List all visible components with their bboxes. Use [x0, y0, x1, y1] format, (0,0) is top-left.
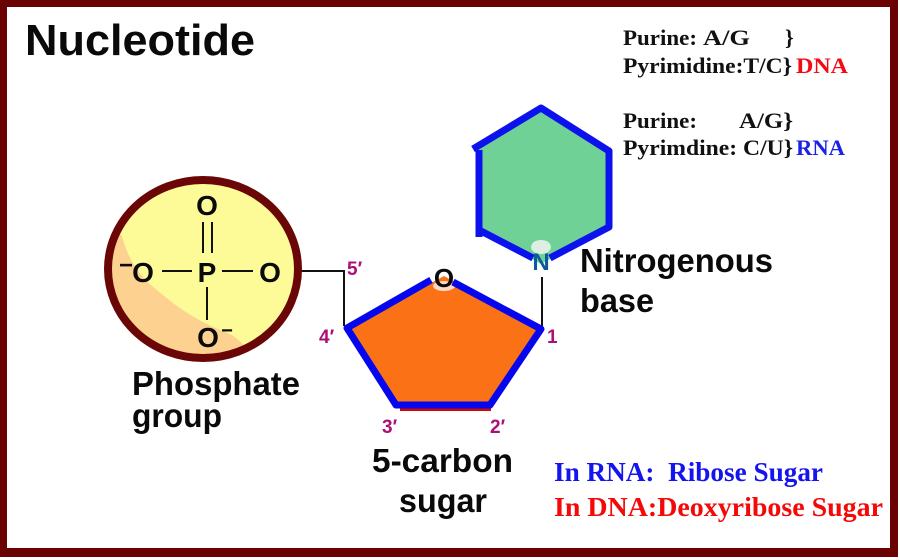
label: phosphate group: group — [132, 397, 222, 434]
panel: DNA base key — [623, 25, 848, 78]
connector lines — [300, 271, 542, 330]
callout: sugar types: In RNA: Ribose Sugar — [554, 457, 823, 487]
carbon position labels: 3′ — [382, 417, 398, 438]
carbon position labels: 1 — [547, 327, 558, 348]
icon: phosphate group circle: P — [198, 257, 216, 288]
icon: 5-carbon sugar pentagon — [347, 263, 541, 409]
label: 5-carbon sugar — [372, 442, 513, 519]
title: Nucleotide — [25, 16, 255, 65]
panel: DNA base key: } — [785, 25, 794, 50]
callout: sugar types — [554, 457, 883, 522]
icon: nitrogenous base hexagon: N — [532, 249, 550, 276]
panel: DNA base key: DNA — [796, 53, 848, 78]
panel: RNA base key: A/G} — [739, 108, 793, 133]
label: phosphate group: Phosphate — [132, 365, 300, 402]
panel: RNA base key: Purine: — [623, 108, 697, 133]
icon: nitrogenous base hexagon — [473, 108, 609, 276]
label: 5-carbon sugar: 5-carbon — [372, 442, 513, 479]
callout: sugar types: In DNA:Deoxyribose Sugar — [554, 492, 883, 522]
label: phosphate group — [132, 365, 300, 434]
panel: DNA base key: Purine: — [623, 25, 697, 50]
carbon position labels: 2′ — [490, 417, 506, 438]
panel: DNA base key: A/G — [703, 25, 750, 50]
icon: phosphate group circle: O — [197, 322, 219, 353]
panel: RNA base key — [623, 108, 845, 160]
carbon position labels — [319, 259, 558, 438]
label: nitrogenous base — [580, 242, 773, 319]
label: nitrogenous base: Nitrogenous — [580, 242, 773, 279]
panel: RNA base key: Pyrimdine: C/U} — [623, 135, 793, 160]
icon: 5-carbon sugar pentagon: O — [434, 263, 454, 293]
label: nitrogenous base: base — [580, 282, 654, 319]
carbon position labels: 4′ — [319, 327, 335, 348]
panel: DNA base key: Pyrimidine:T/C} — [623, 53, 792, 78]
icon: phosphate group circle: O — [196, 190, 218, 221]
carbon position labels: 5′ — [347, 259, 363, 280]
icon: phosphate group circle — [100, 180, 298, 370]
icon: phosphate group circle: O — [132, 257, 154, 288]
panel: RNA base key: RNA — [796, 135, 845, 160]
label: 5-carbon sugar: sugar — [399, 482, 487, 519]
icon: phosphate group circle: − — [119, 252, 133, 279]
icon: phosphate group circle: O — [259, 257, 281, 288]
icon: phosphate group circle: − — [221, 320, 233, 342]
